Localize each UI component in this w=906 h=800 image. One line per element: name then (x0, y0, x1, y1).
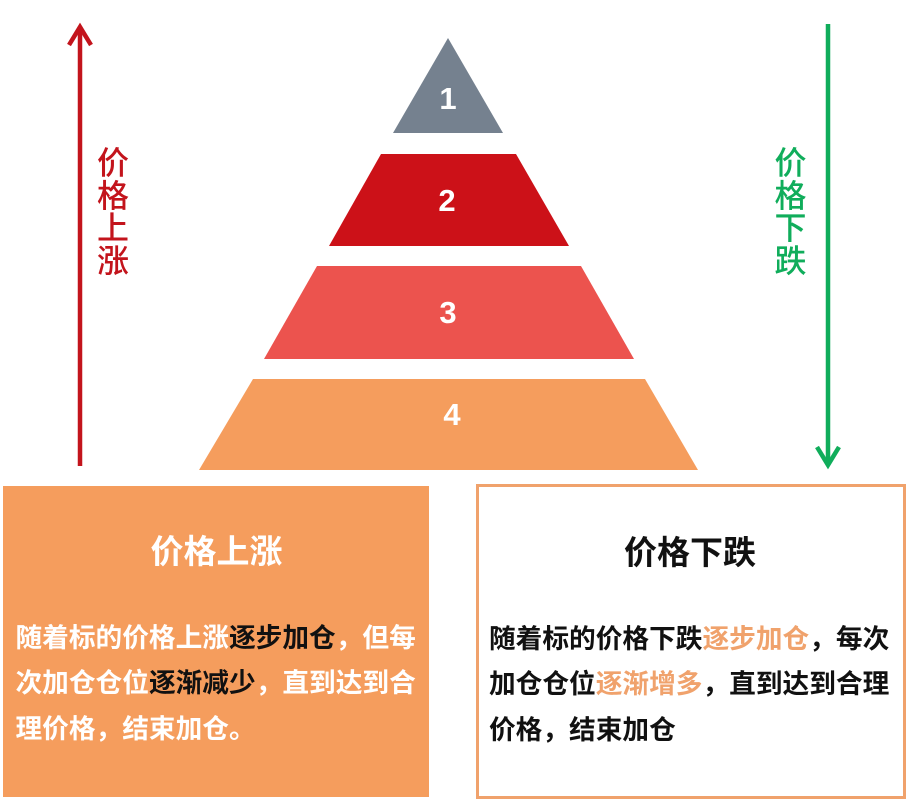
panel: price rising (3, 486, 429, 797)
panel text: price rising: 随着标的价格上涨逐步加仓，但每 (16, 622, 416, 652)
panel text: price falling: 随着标的价格下跌逐步加仓，每次 (489, 624, 889, 654)
label: price falling: 价格下跌 (774, 145, 806, 278)
panel text: price rising (16, 622, 416, 744)
panel text: price rising: 次加仓仓位逐渐减少，直到达到合 (16, 668, 416, 698)
panel: price falling (476, 484, 906, 799)
pyramid tier 2 (329, 154, 569, 246)
panel heading: price rising: 价格上涨 (150, 533, 282, 570)
panel text: price rising: 理价格，结束加仓。 (16, 714, 256, 744)
arrow: price rising (69, 27, 91, 466)
pyramid tier 1: 1 (439, 81, 457, 116)
panel heading: price falling: 价格下跌 (624, 534, 756, 570)
panel text: price falling (489, 624, 889, 744)
panel text: price falling: 加仓仓位逐渐增多，直到达到合理 (489, 669, 889, 699)
pyramid tier 2: 2 (438, 183, 456, 218)
label: price rising: 价格上涨 (97, 145, 129, 278)
arrow: price falling (817, 24, 839, 465)
pyramid tier 1 (393, 38, 503, 133)
pyramid tier 4: 4 (443, 397, 461, 432)
pyramid tier 3: 3 (439, 295, 457, 330)
pyramid tier 4 (199, 379, 698, 470)
panel text: price falling: 价格，结束加仓 (489, 714, 676, 744)
pyramid tier 3 (264, 266, 634, 359)
